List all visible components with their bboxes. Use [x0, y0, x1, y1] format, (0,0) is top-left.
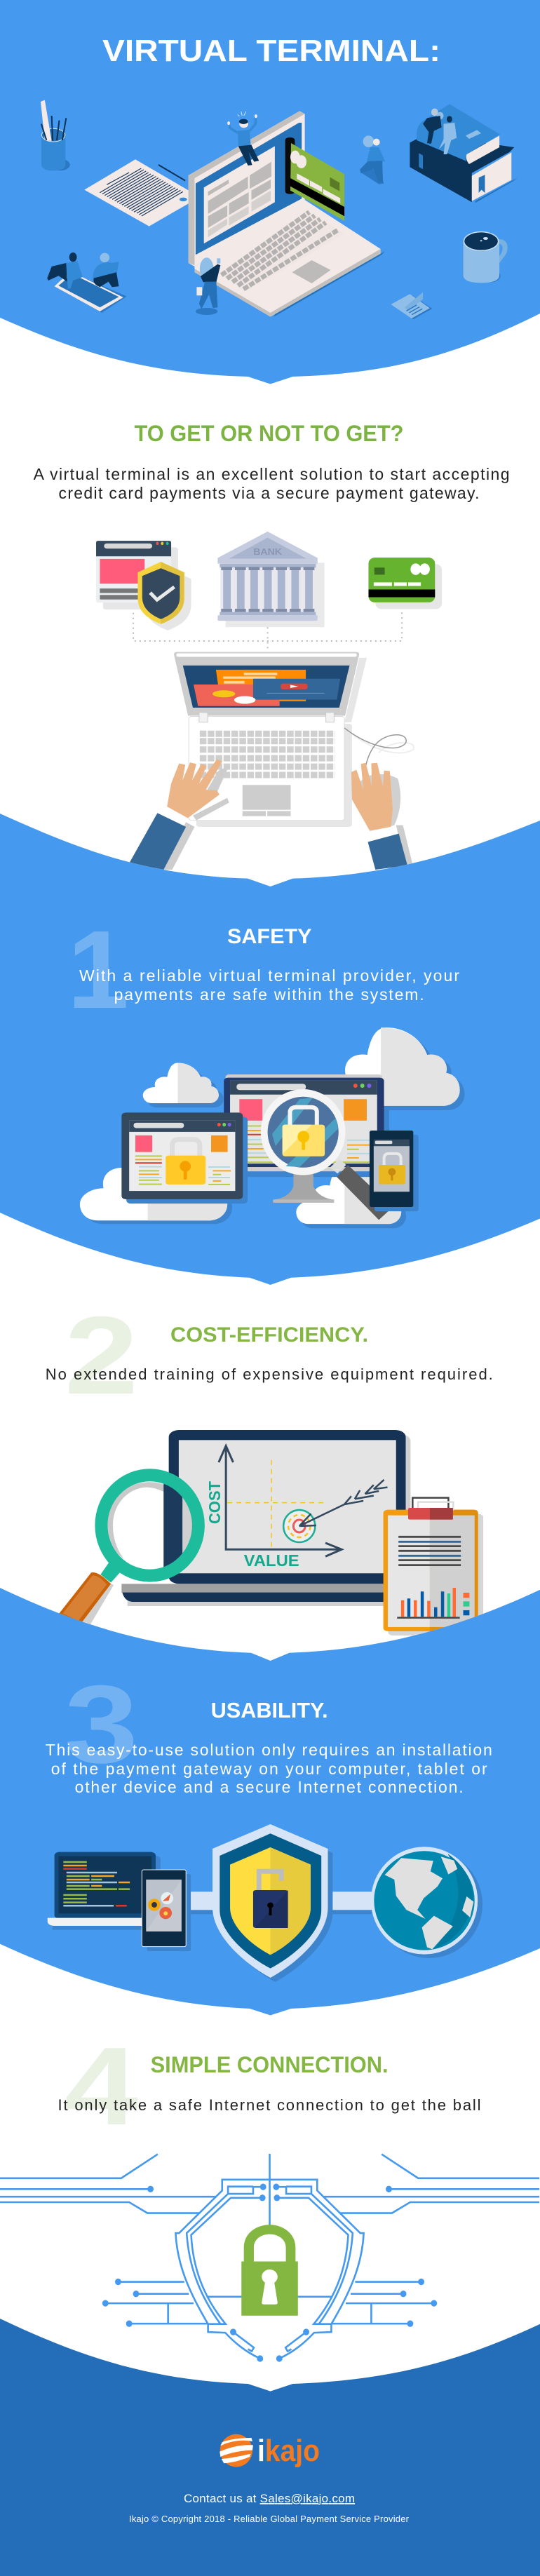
- icon: credit card: [368, 558, 442, 609]
- panel: usability background: [0, 1543, 540, 2016]
- keyboard: [219, 210, 344, 291]
- touchpad: [292, 260, 330, 283]
- heading: usability: [46, 1663, 492, 1796]
- mini bar chart: [397, 1588, 460, 1618]
- people on books: [431, 109, 438, 116]
- illustration: circuit shield with padlock: [0, 2154, 539, 2362]
- icon: pencil cup: [41, 100, 70, 170]
- document lines: [398, 1537, 461, 1565]
- logo globe: [220, 2434, 253, 2467]
- chart axes: [219, 1446, 342, 1556]
- laptop shadow: [274, 251, 385, 317]
- icon: mug: [464, 232, 508, 283]
- circuit right: [270, 2154, 539, 2362]
- number 1: 1: [67, 908, 129, 1032]
- laptop base: [196, 724, 352, 827]
- icon: tablet: [121, 1112, 248, 1203]
- illustration: cloud security devices: [80, 1027, 464, 1228]
- description: No extended training of expensive equipment required.: [46, 1365, 493, 1383]
- web page: [204, 146, 275, 243]
- copyright line: Ikajo © Copyright 2018 - Reliable Global Payment Service Provider: [129, 2514, 410, 2524]
- description: other device and a secure Internet connection.: [75, 1778, 464, 1796]
- title: TO GET OR NOT TO GET?: [135, 421, 404, 446]
- center wire: [269, 2154, 271, 2226]
- icon: monitor: [224, 1074, 389, 1177]
- description: With a reliable virtual terminal provider, your: [79, 966, 459, 985]
- contact line: Contact us at Sales@ikajo.com: [184, 2492, 355, 2505]
- description: [79, 966, 459, 1004]
- panel: simple connection background: [0, 1992, 540, 2392]
- icon: person on laptop: [227, 112, 259, 166]
- guide lines: [227, 1460, 328, 1548]
- arrow: [299, 1480, 387, 1526]
- title: COST-EFFICIENCY.: [170, 1323, 368, 1347]
- number 2: 2: [65, 1294, 138, 1417]
- icon: laptop with hands: [129, 652, 414, 870]
- icon: phone with app icons: [142, 1870, 191, 1951]
- heading: safety: [67, 908, 459, 1032]
- description: payments are safe within the system.: [114, 985, 424, 1004]
- mouse cable: [352, 734, 414, 753]
- panel: footer: [0, 2300, 540, 2576]
- icon: magnifying glass: [58, 1473, 198, 1627]
- icon: target: [283, 1510, 315, 1542]
- axis label: value: VALUE: [244, 1551, 299, 1570]
- icon: magnifier with padlock: [261, 1089, 393, 1220]
- laptop lid: [189, 111, 305, 267]
- description: [34, 465, 510, 502]
- title: SAFETY: [227, 925, 311, 948]
- left cuff: [173, 810, 188, 818]
- number 4: 4: [65, 2025, 138, 2148]
- left hand: [167, 760, 222, 818]
- footer background: [0, 2300, 540, 2576]
- heading: cost-efficiency: [46, 1294, 493, 1417]
- icon: clipboard: [384, 1498, 483, 1636]
- icon: bank: BANK: [253, 546, 282, 557]
- right sleeve: [367, 825, 413, 870]
- card slot: [285, 137, 295, 194]
- panel: intro background: [0, 281, 540, 886]
- illustration: hero laptop scene: [41, 100, 518, 319]
- left hand shadow: [193, 766, 229, 821]
- dotted connectors: [133, 612, 403, 648]
- description: [46, 1741, 492, 1796]
- icon: big cloud: [324, 1027, 464, 1110]
- icon: document: [84, 159, 189, 227]
- connector bar: [186, 1891, 372, 1914]
- left sleeve: [129, 813, 194, 870]
- icon: small cloud: [143, 1063, 224, 1107]
- description: This easy-to-use solution only requires an installation: [46, 1741, 492, 1759]
- illustration: cost value chart, magnifier and clipboard: [58, 1430, 483, 1636]
- title: VIRTUAL TERMINAL:: [102, 34, 440, 68]
- title: USABILITY.: [211, 1698, 328, 1722]
- right hand: [351, 763, 393, 832]
- padlock: [241, 2225, 298, 2316]
- illustration: devices, shield and globe: [48, 1824, 482, 1982]
- icon: small notebook: [391, 292, 432, 319]
- heading: to get or not to get: [34, 421, 510, 502]
- icon: globe: [371, 1847, 482, 1958]
- icon: left cloud: [80, 1140, 232, 1224]
- logo wordmark: ikajo: [257, 2434, 320, 2468]
- icon: walking person: [360, 135, 385, 184]
- panel: cost-efficiency background: [0, 1262, 540, 1661]
- icon: laptop with chart: [121, 1430, 410, 1606]
- icon: bank: [217, 532, 325, 627]
- icon: person standing at keyboard: [196, 257, 220, 315]
- description: It only take a safe Internet connection to get the ball: [58, 2096, 480, 2114]
- icon: laptop with code: [48, 1852, 161, 1930]
- screen: [196, 123, 302, 255]
- laptop lid: [344, 658, 367, 722]
- heading: simple connection: [58, 2025, 480, 2148]
- icon: books with people: [410, 104, 518, 203]
- circuit left: [0, 2154, 270, 2359]
- axis label: cost: COST: [205, 1481, 224, 1524]
- description: A virtual terminal is an excellent solution to start accepting: [34, 465, 510, 483]
- laptop base: [194, 200, 381, 317]
- credit card: [290, 143, 344, 221]
- illustration: payment gateway diagram: [96, 532, 442, 870]
- description: credit card payments via a secure payment gateway.: [59, 484, 480, 502]
- icon: browser with shield: [96, 541, 191, 630]
- icon: shield with open padlock: [212, 1824, 332, 1982]
- icon: people on phone: [47, 252, 127, 313]
- number 3: 3: [65, 1663, 138, 1786]
- title: SIMPLE CONNECTION.: [151, 2052, 389, 2077]
- keyboard: [200, 734, 335, 775]
- mouse and right hand shadow: [360, 774, 401, 826]
- panel: hero background: [0, 0, 540, 384]
- icon: lower cloud: [296, 1165, 406, 1228]
- icon: phone: [370, 1131, 419, 1211]
- panel: safety background: [0, 785, 540, 1285]
- description: of the payment gateway on your computer, tablet or: [51, 1760, 487, 1778]
- circuit nodes left: [102, 2184, 266, 2362]
- right cuff: [370, 826, 391, 832]
- icon: laptop with card: [189, 111, 385, 317]
- icon: ikajo logo: [220, 2434, 320, 2468]
